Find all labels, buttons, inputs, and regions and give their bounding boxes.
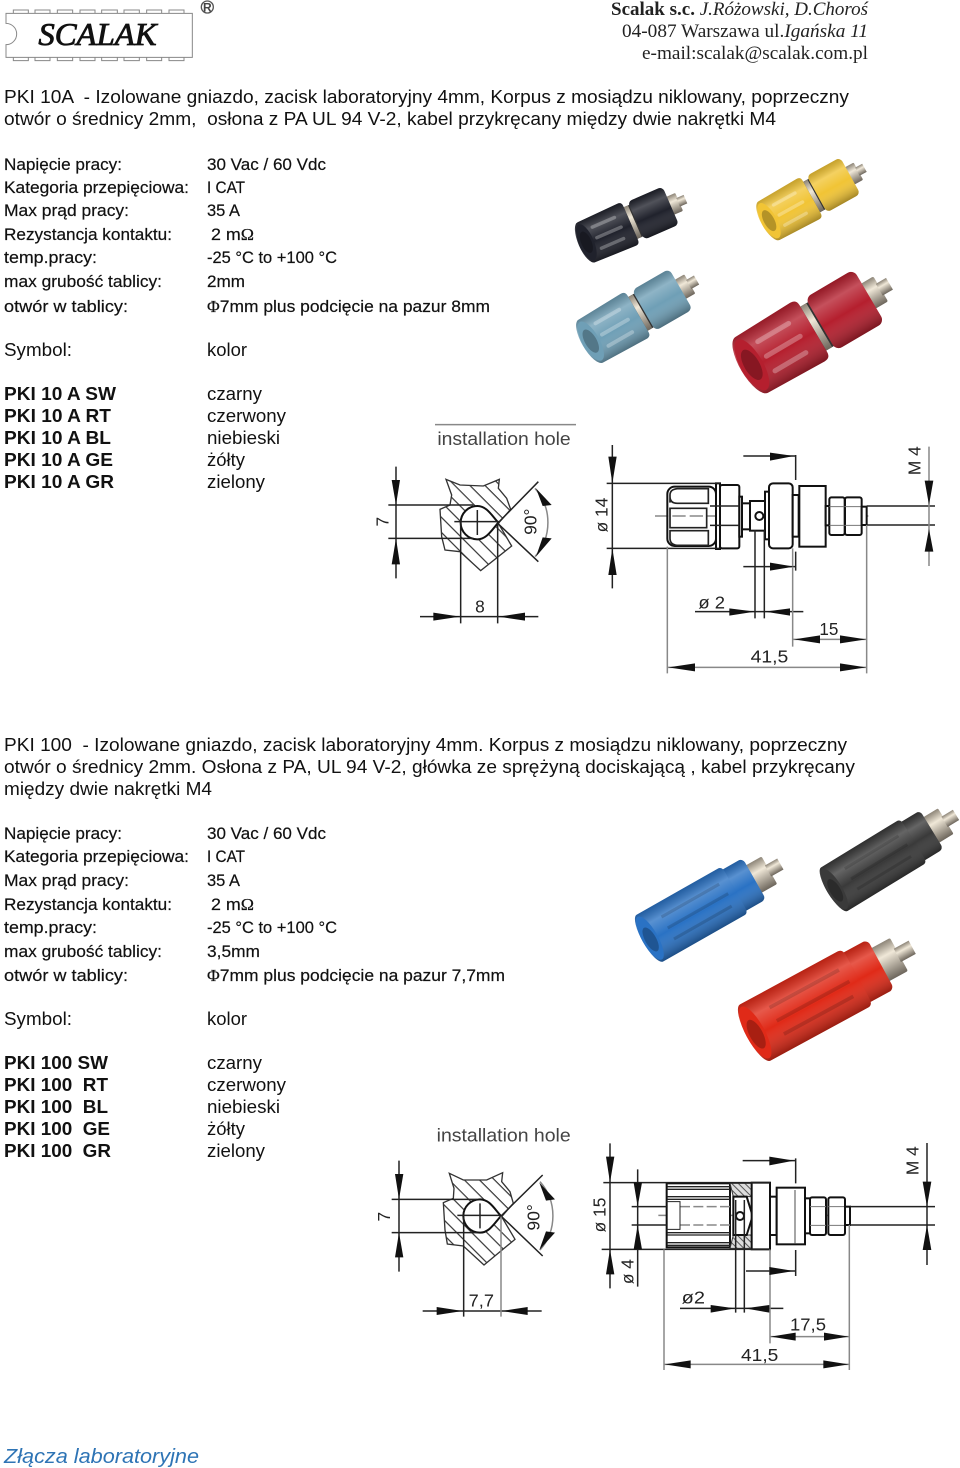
spec table: PKI 10A: Rezystancja kontaktu: <box>4 225 172 244</box>
diagram: PKI 10A side view with dimensions <box>591 445 935 673</box>
diagram: PKI 100 side view with dimensions: 41,5 <box>741 1345 778 1365</box>
photo: black connector <box>570 178 695 267</box>
symbol table: PKI 10A: Symbol: <box>4 339 72 360</box>
symbol table: PKI 100 <box>4 1008 287 1161</box>
spec table: PKI 10A: temp.pracy: <box>4 248 97 267</box>
photo: yellow connector <box>751 147 876 245</box>
diagram: installation hole 8 mm: 8 <box>475 597 485 617</box>
symbol table: PKI 10A: kolor <box>207 339 247 360</box>
company address <box>611 0 869 64</box>
symbol table: PKI 100: Symbol: <box>4 1008 72 1029</box>
symbol table: PKI 100: kolor <box>207 1008 247 1029</box>
spec table: PKI 100: 3,5mm <box>207 942 260 961</box>
spec table: PKI 100: 2 mΩ <box>211 895 254 914</box>
spec table: PKI 10A: Φ7mm plus podcięcie na pazur 8mm <box>207 297 490 316</box>
symbol table: PKI 100: PKI 100 SW <box>4 1052 108 1073</box>
diagram: PKI 10A side view with dimensions: ø 2 <box>698 592 725 612</box>
diagram: PKI 100 side view with dimensions: ø 15 <box>589 1198 609 1232</box>
spec table: PKI 10A <box>4 155 490 316</box>
spec table: PKI 10A: 35 A <box>207 201 241 220</box>
symbol table: PKI 10A: PKI 10 A RT <box>4 405 112 426</box>
symbol table: PKI 10A: PKI 10 A BL <box>4 427 111 448</box>
symbol table: PKI 100: PKI 100 BL <box>4 1096 108 1117</box>
heading: PKI 100 description: między dwie nakrętki M4 <box>4 778 212 799</box>
heading: PKI 10A description: otwór o średnicy 2mm, osłona z PA UL 94 V-2, kabel przykręcany między dwie nakrętki M4 <box>4 108 776 129</box>
diagram: PKI 10A side view with dimensions: M 4 <box>905 446 925 475</box>
diagram: installation hole 8 mm <box>373 425 576 623</box>
diagram: installation hole 8 mm: 90° <box>521 509 541 535</box>
spec table: PKI 100: temp.pracy: <box>4 918 97 937</box>
symbol table: PKI 100: czerwony <box>207 1074 287 1095</box>
diagram: installation hole 7,7 mm: 7 <box>374 1212 394 1221</box>
heading: PKI 10A description <box>4 86 850 129</box>
symbol table: PKI 10A: żółty <box>207 449 246 470</box>
symbol table: PKI 10A: zielony <box>207 471 266 492</box>
symbol table: PKI 10A: czerwony <box>207 405 287 426</box>
diagram: installation hole 7,7 mm: 7,7 <box>469 1291 494 1311</box>
spec table: PKI 100: Rezystancja kontaktu: <box>4 895 172 914</box>
spec table: PKI 100: Max prąd pracy: <box>4 871 129 890</box>
symbol table: PKI 100: czarny <box>207 1052 263 1073</box>
spec table: PKI 100: 35 A <box>207 871 241 890</box>
photo: blue connector <box>630 841 794 965</box>
spec table: PKI 10A: otwór w tablicy: <box>4 297 128 316</box>
footer: section title: Złącza laboratoryjne <box>3 1446 199 1468</box>
spec table: PKI 10A: Kategoria przepięciowa: <box>4 178 189 197</box>
logo: SCALAK <box>6 0 213 61</box>
diagram: PKI 100 side view with dimensions: M 4 <box>902 1146 922 1175</box>
spec table: PKI 100: Kategoria przepięciowa: <box>4 847 189 866</box>
photo: black connector <box>815 793 960 915</box>
diagram: installation hole 8 mm: installation hole <box>437 428 571 449</box>
spec table: PKI 100 <box>4 824 505 985</box>
heading: PKI 100 description: PKI 100 - Izolowane gniazdo, zacisk laboratoryjny 4mm. Korpus z mosiądzu niklowany, poprzeczny <box>4 734 848 755</box>
spec table: PKI 10A: Max prąd pracy: <box>4 201 129 220</box>
symbol table: PKI 100: PKI 100 GR <box>4 1140 112 1161</box>
diagram: PKI 100 side view with dimensions: ø 4 <box>617 1259 637 1284</box>
photo: red connector <box>724 254 907 400</box>
diagram: PKI 100 side view with dimensions: 17,5 <box>790 1315 826 1335</box>
diagram: PKI 10A side view with dimensions: ø 14 <box>591 497 611 532</box>
spec table: PKI 100: otwór w tablicy: <box>4 966 128 985</box>
symbol table: PKI 10A: PKI 10 A GR <box>4 471 115 492</box>
spec table: PKI 100: 30 Vac / 60 Vdc <box>207 824 326 843</box>
spec table: PKI 10A: max grubość tablicy: <box>4 272 162 291</box>
diagram: PKI 100 side view with dimensions: ø2 <box>682 1287 705 1307</box>
diagram: PKI 10A side view with dimensions: 41,5 <box>751 647 788 667</box>
symbol table: PKI 10A: niebieski <box>207 427 280 448</box>
spec table: PKI 100: Φ7mm plus podcięcie na pazur 7,7mm <box>207 966 505 985</box>
symbol table: PKI 100: PKI 100 GE <box>4 1118 110 1139</box>
spec table: PKI 10A: I CAT <box>207 178 245 197</box>
diagram: PKI 10A side view with dimensions: 15 <box>819 619 838 639</box>
diagram: PKI 100 side view with dimensions <box>589 1143 935 1370</box>
heading: PKI 10A description: PKI 10A - Izolowane gniazdo, zacisk laboratoryjny 4mm, Korpus z mosiądzu niklowany, poprzeczny <box>4 86 850 107</box>
diagram: installation hole 8 mm: 7 <box>373 517 393 526</box>
spec table: PKI 10A: Napięcie pracy: <box>4 155 122 174</box>
symbol table: PKI 10A <box>4 339 287 492</box>
symbol table: PKI 10A: PKI 10 A SW <box>4 383 116 404</box>
logo: SCALAK: R <box>203 0 212 14</box>
spec table: PKI 10A: -25 °C to +100 °C <box>207 248 337 267</box>
diagram: installation hole 7,7 mm: 90° <box>523 1204 543 1230</box>
spec table: PKI 10A: 2 mΩ <box>211 225 254 244</box>
spec table: PKI 10A: 30 Vac / 60 Vdc <box>207 155 326 174</box>
diagram: installation hole 7,7 mm <box>374 1125 571 1317</box>
spec table: PKI 10A: 2mm <box>207 272 245 291</box>
symbol table: PKI 10A: czarny <box>207 383 263 404</box>
photo: red connector <box>732 919 927 1065</box>
heading: PKI 100 description: otwór o średnicy 2mm. Osłona z PA, UL 94 V-2, główka ze sprężyną dociskającą , kabel przykręcany <box>4 756 856 777</box>
company address: 04-087 Warszawa ul. Igańska 11 <box>622 21 868 42</box>
symbol table: PKI 100: niebieski <box>207 1096 280 1117</box>
symbol table: PKI 100: zielony <box>207 1140 266 1161</box>
symbol table: PKI 100: PKI 100 RT <box>4 1074 109 1095</box>
spec table: PKI 100: I CAT <box>207 847 245 866</box>
symbol table: PKI 100: żółty <box>207 1118 246 1139</box>
logo: SCALAK: SCALAK <box>38 16 158 52</box>
symbol table: PKI 10A: PKI 10 A GE <box>4 449 113 470</box>
diagram: installation hole 7,7 mm: installation hole <box>437 1125 571 1146</box>
company address: e-mail:scalak@scalak.com.pl <box>642 43 868 64</box>
spec table: PKI 100: -25 °C to +100 °C <box>207 918 337 937</box>
heading: PKI 100 description <box>4 734 856 799</box>
spec table: PKI 100: Napięcie pracy: <box>4 824 122 843</box>
photo: steel-blue connector <box>570 257 710 368</box>
spec table: PKI 100: max grubość tablicy: <box>4 942 162 961</box>
